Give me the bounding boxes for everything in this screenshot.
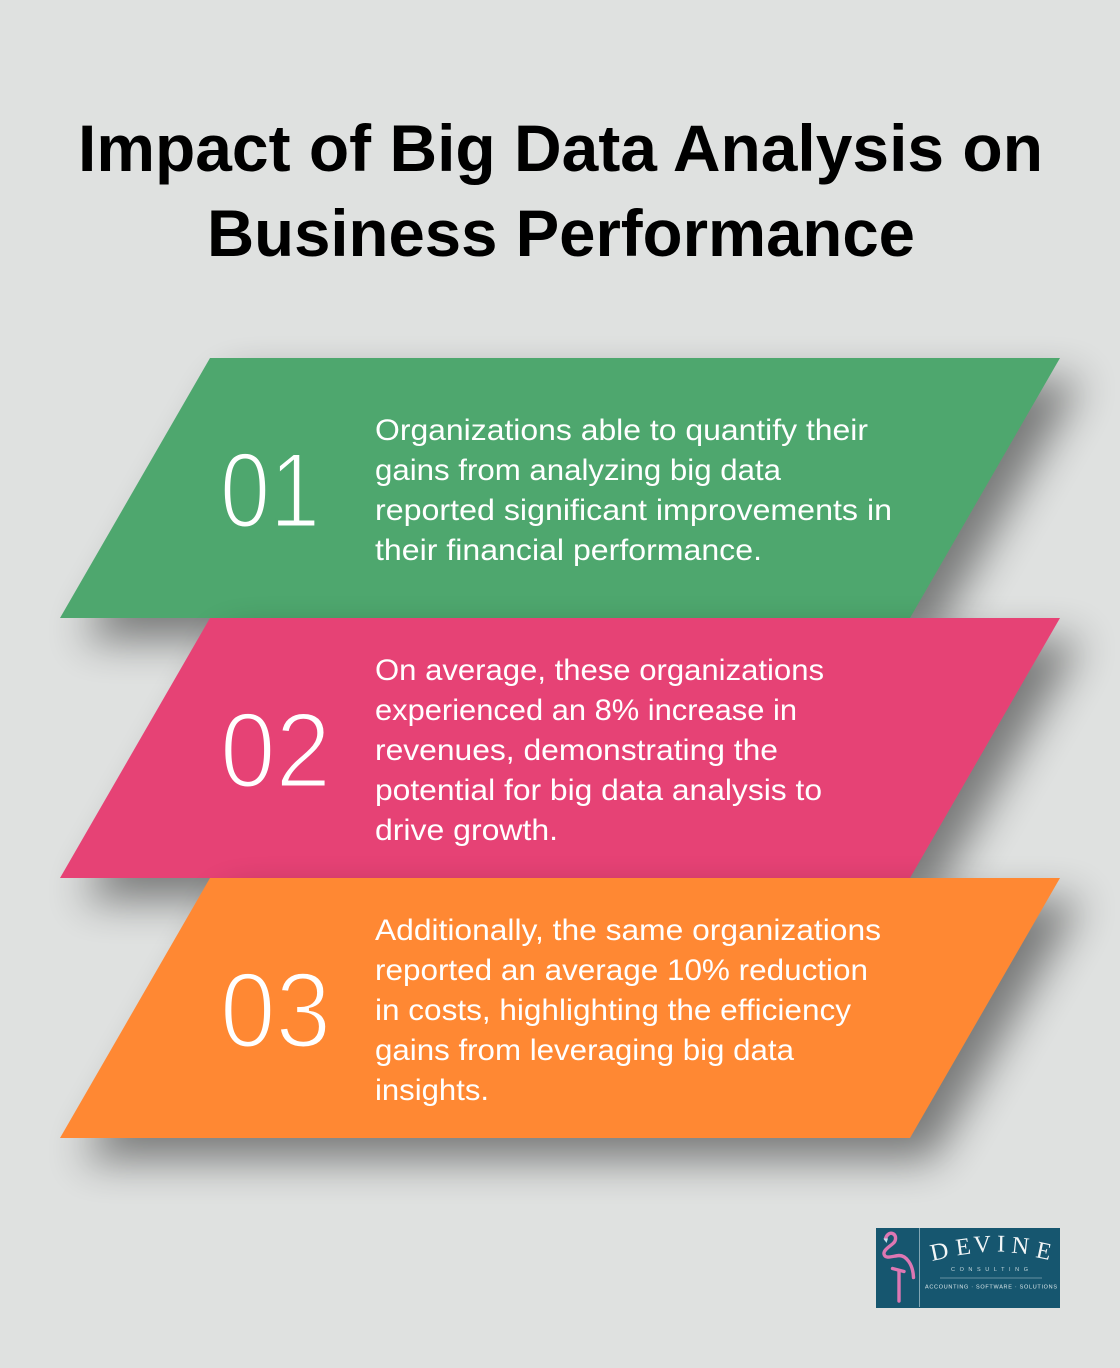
text: step 03 description: insights. (375, 1074, 489, 1107)
text: step 02 description: On average, these organizations (375, 654, 824, 687)
logo tagline: ACCOUNTING · SOFTWARE · SOLUTIONS (925, 1284, 1057, 1290)
orange parallelogram (60, 878, 1060, 1138)
logo wordmark: V (973, 1232, 992, 1258)
text: step 03 description: gains from leveraging big data (375, 1034, 794, 1067)
green parallelogram (60, 358, 1060, 618)
logo wordmark: I (997, 1232, 1005, 1258)
text: step 01 description: Organizations able to quantify their (375, 414, 868, 447)
text: step 01 description: their financial performance. (375, 534, 762, 567)
logo wordmark: E (1034, 1237, 1054, 1266)
text: step 02 description: revenues, demonstrating the (375, 734, 778, 767)
title: Impact of Big Data Analysis on (78, 111, 1043, 185)
logo wordmark (928, 1232, 1054, 1267)
text: step 01 description: reported significant improvements in (375, 494, 892, 527)
text: step 01 description: gains from analyzing big data (375, 454, 781, 487)
logo wordmark: D (928, 1237, 951, 1267)
pink parallelogram (60, 618, 1060, 878)
number 01: 01 (220, 430, 320, 550)
title (78, 111, 1043, 270)
text: step 03 description: Additionally, the same organizations (375, 914, 881, 947)
title: Business Performance (207, 196, 915, 270)
number 03: 03 (220, 950, 331, 1070)
number 02: 02 (220, 690, 331, 810)
text: step 02 description: potential for big data analysis to (375, 774, 822, 807)
panel: step 01 (60, 358, 1060, 618)
panel: step 02 (60, 618, 1060, 878)
text: step 01 description (375, 414, 892, 567)
text: step 03 description: reported an average 10% reduction (375, 954, 868, 987)
text: step 02 description: drive growth. (375, 814, 558, 847)
text: step 02 description (375, 654, 824, 847)
text: step 02 description: experienced an 8% increase in (375, 694, 797, 727)
text: step 03 description: in costs, highlighting the efficiency (375, 994, 851, 1027)
logo wordmark: E (954, 1234, 972, 1261)
icon: flamingo (884, 1233, 914, 1301)
text: step 03 description (375, 914, 881, 1107)
logo subtitle: CONSULTING (951, 1267, 1028, 1273)
logo wordmark: N (1010, 1233, 1030, 1260)
logo: Devine Consulting (876, 1228, 1060, 1308)
panel: step 03 (60, 878, 1060, 1138)
